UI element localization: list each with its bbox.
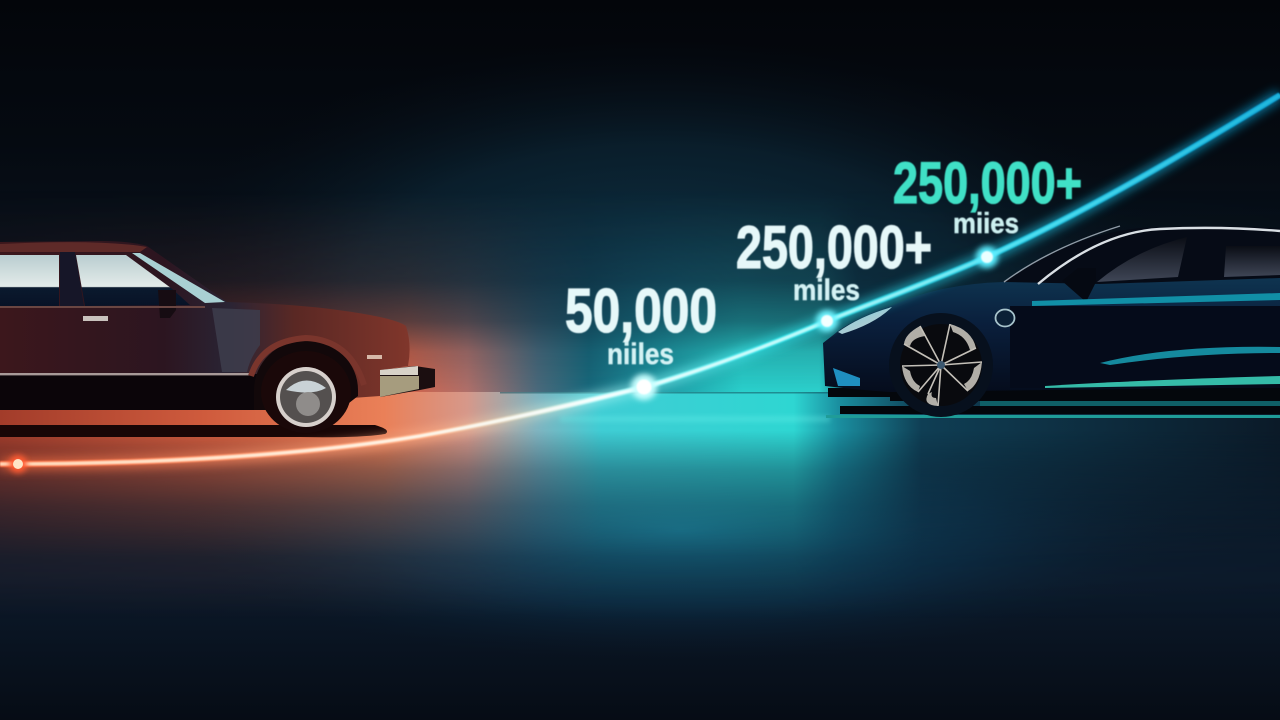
new electric car [823,226,1280,418]
old car mirror [158,290,176,318]
new car side window [1097,237,1187,282]
old rusty car [0,241,435,437]
new car mirror [1062,268,1096,302]
old car bumper [380,366,435,397]
new car rear window [1224,246,1280,277]
old car lower shadow [0,374,262,410]
new car side swoosh [1100,347,1280,365]
old car windshield [132,253,225,303]
new car charge port [996,310,1014,326]
new car cabin [1003,226,1280,298]
glowing mileage curve [0,95,1280,464]
marker: 50,000 miles [631,374,657,400]
old car roof strip [0,242,147,252]
label: teal 250,000+ miles: 250,000+ [893,151,1082,216]
label: 50,000 miles: niiles [607,338,674,371]
new car ground bands [826,388,1280,418]
marker: start [9,455,27,473]
old car wheel arch [251,338,364,385]
old car faded panel [212,308,260,372]
new car beltline glow [1032,293,1280,306]
label: 250,000+ miles [736,214,932,307]
old car side marker [367,355,382,359]
old car body trim [0,373,252,375]
new car wheel [889,313,993,417]
new car body [823,278,1280,392]
old car wheel [261,351,351,433]
old car rear window [0,255,59,306]
new car front vent [833,368,860,386]
old car wheel well [254,340,358,410]
label: 50,000 miles [565,277,717,371]
new car headlight [838,307,892,334]
old car ground shadow [0,425,387,437]
old car beltline trim [0,306,205,308]
old car door handle [83,316,108,321]
old car pillar [60,252,84,306]
label: teal 250,000+ miles: miies [953,208,1019,240]
old car front window [76,255,190,306]
new car lower dark [1010,306,1280,388]
new car sill light [1045,376,1280,388]
label: 250,000+ miles: 250,000+ [736,214,932,281]
marker: top 250,000+ miles [976,246,998,268]
new car windshield edge [1004,226,1120,282]
new car chrome roofline [1038,228,1280,284]
label: 250,000+ miles: miles [793,274,860,307]
label: 50,000 miles: 50,000 [565,277,717,346]
label: teal 250,000+ miles [893,151,1082,240]
marker: mid 250,000+ miles [816,310,838,332]
old car body [0,241,410,398]
